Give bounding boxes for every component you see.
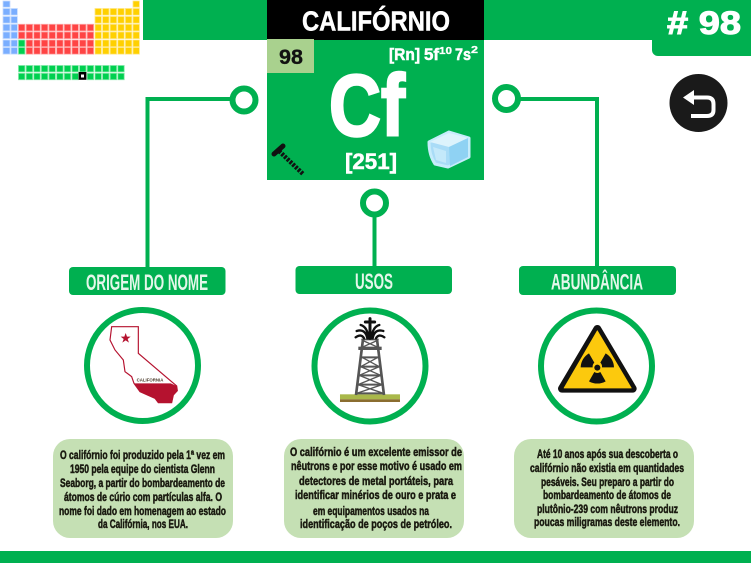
electron configuration: 2 — [471, 45, 479, 56]
header band — [143, 0, 751, 40]
text panel: usos — [284, 439, 464, 538]
heading: origem do nome — [69, 267, 226, 295]
icon: radiation warning — [541, 310, 652, 422]
element card — [267, 39, 484, 180]
title — [267, 0, 484, 40]
heading: abundância: ABUNDÂNCIA — [551, 270, 643, 294]
text panel: origem do nome: 1950 pela equipe do cientista Glenn — [70, 462, 215, 476]
icon: california map — [87, 310, 198, 421]
text panel: origem do nome — [53, 439, 233, 538]
connector: name — [148, 88, 256, 268]
text panel: origem do nome: Seaborg, a partir do bombardeamento de — [60, 476, 225, 490]
icon: periodic table — [3, 1, 139, 80]
electron configuration: 5f — [424, 46, 440, 64]
icon: california map: CALIFORNIA — [137, 378, 164, 383]
heading: abundância — [519, 266, 676, 295]
heading: usos: USOS — [355, 269, 393, 294]
element number tab: # 98 — [667, 5, 741, 41]
text panel: abundância: plutônio-239 com nêutrons produz — [537, 502, 678, 516]
bottom band — [0, 551, 751, 563]
electron configuration: [Rn] — [389, 46, 420, 64]
title: CALIFÓRNIO — [302, 6, 450, 36]
text panel: abundância — [514, 439, 694, 538]
atomic number — [267, 39, 314, 73]
atomic mass: [251] — [345, 149, 397, 174]
text panel: origem do nome: nome foi dado em homenagem ao estado — [59, 504, 226, 518]
atomic number: 98 — [279, 45, 303, 69]
connector: uses — [363, 192, 386, 267]
heading: usos — [296, 266, 452, 294]
element number tab — [652, 0, 751, 56]
electron configuration — [389, 45, 479, 64]
text panel: origem do nome: O califórnio foi produzido pela 1ª vez em — [60, 448, 225, 462]
text panel: usos: em equipamentos usados na — [313, 504, 429, 518]
text panel: abundância: Até 10 anos após sua descoberta o — [537, 447, 678, 461]
connector: abundance — [495, 87, 597, 267]
text panel: origem do nome: átomos de cúrio com partículas alfa. O — [64, 490, 222, 504]
text panel: usos: identificação de poços de petróleo. — [300, 517, 452, 531]
element symbol: Cf — [329, 58, 406, 154]
text panel: abundância: poucas miligramas deste elemento. — [534, 515, 680, 529]
text panel: origem do nome: da Califórnia, nos EUA. — [98, 517, 188, 531]
text panel: abundância: pesáveis. Seu preparo a partir do — [541, 475, 674, 489]
electron configuration: 7s — [455, 46, 471, 64]
icon: screw — [274, 146, 303, 174]
text panel: abundância: califórnio não existia em quantidades — [530, 461, 684, 475]
icon: back button — [670, 74, 728, 132]
heading: origem do nome: ORIGEM DO NOME — [86, 270, 208, 295]
text panel: usos: nêutrons e por esse motivo é usado em — [291, 459, 462, 473]
icon: oil derrick — [314, 310, 426, 422]
icon: ice cube — [429, 132, 469, 167]
text panel: usos: detectores de metal portáteis, para — [299, 474, 453, 488]
text panel: abundância: bombardeamento de átomos de — [543, 488, 671, 502]
electron configuration: 10 — [439, 45, 452, 57]
text panel: usos: identificar minérios de ouro e prata e — [295, 488, 456, 502]
text panel: usos: O califórnio é um excelente emissor de — [290, 445, 462, 459]
